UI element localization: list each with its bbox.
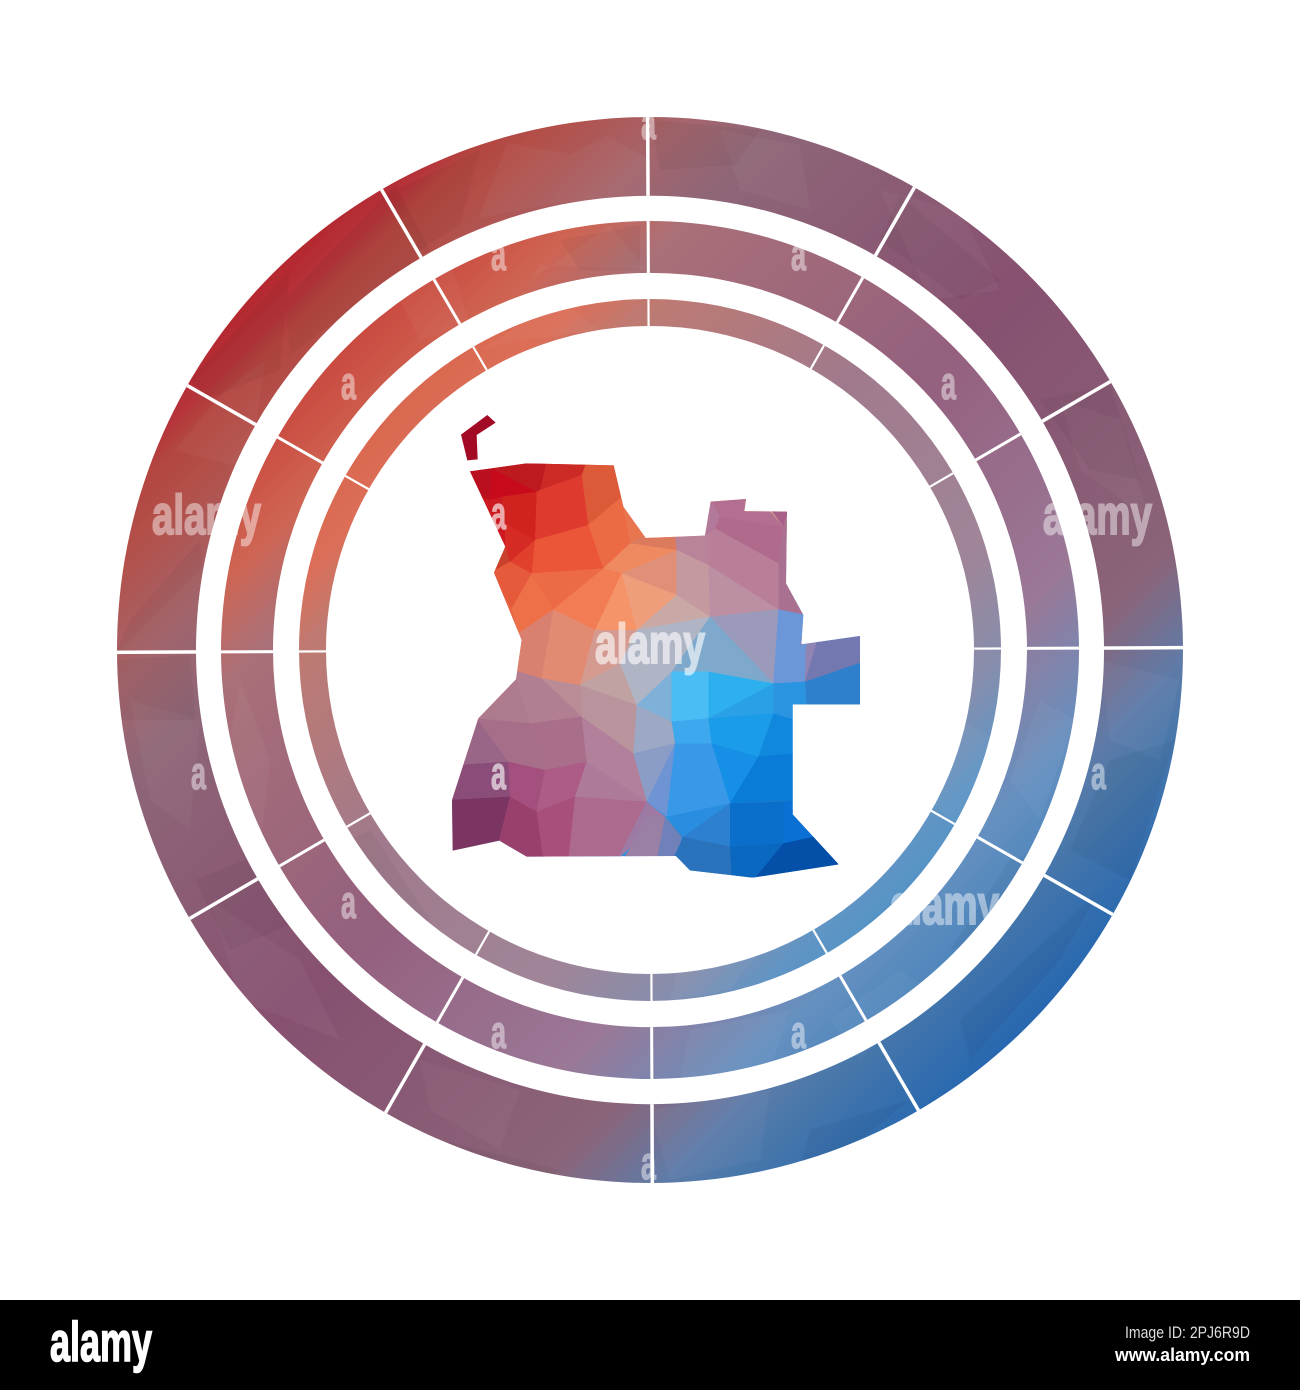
watermark glyphs over rings: a xyxy=(641,97,656,149)
footer bar xyxy=(0,1300,1300,1390)
middle ring xyxy=(221,221,1079,1079)
watermark over map: a xyxy=(491,747,506,799)
image id: Image ID: 2PJ6R9D xyxy=(1125,1323,1250,1342)
watermark glyphs over rings: a xyxy=(1091,747,1106,799)
watermark glyphs over rings: a xyxy=(491,1006,506,1058)
watermark glyphs over rings: a xyxy=(341,876,356,928)
watermark glyphs over rings: a xyxy=(191,747,206,799)
watermark over map xyxy=(491,487,705,799)
watermark glyphs over rings: a xyxy=(791,1006,806,1058)
watermark glyphs over rings: a xyxy=(641,1137,656,1189)
outer ring xyxy=(117,117,1183,1183)
footer logo: alamy xyxy=(50,1310,152,1373)
website: www.alamy.com xyxy=(1114,1345,1250,1365)
watermark glyphs over rings: a xyxy=(491,228,506,280)
map: Angola low poly xyxy=(447,415,863,880)
gradient badge with three segmented rings xyxy=(98,97,1202,1202)
inner ring xyxy=(299,299,1001,1001)
watermark glyphs over rings: a xyxy=(791,228,806,280)
watermark over map: a xyxy=(491,487,506,539)
icon: Cabinda exclave xyxy=(461,415,496,460)
low-poly facets over rings xyxy=(285,189,572,310)
middle ring dividers xyxy=(221,221,1079,1079)
watermark glyphs over rings xyxy=(191,97,1106,1189)
watermark words over rings: alamy xyxy=(152,483,261,546)
watermark over map: alamy xyxy=(595,612,705,675)
inner ring dividers xyxy=(299,299,1001,1001)
outer ring dividers xyxy=(98,98,1202,1202)
watermark glyphs over rings: a xyxy=(341,357,356,409)
watermark words over rings: alamy xyxy=(890,873,999,936)
watermark words over rings xyxy=(152,483,1152,936)
watermark glyphs over rings: a xyxy=(941,357,956,409)
watermark words over rings: alamy xyxy=(1043,483,1152,546)
map: main territory facets xyxy=(447,460,863,880)
